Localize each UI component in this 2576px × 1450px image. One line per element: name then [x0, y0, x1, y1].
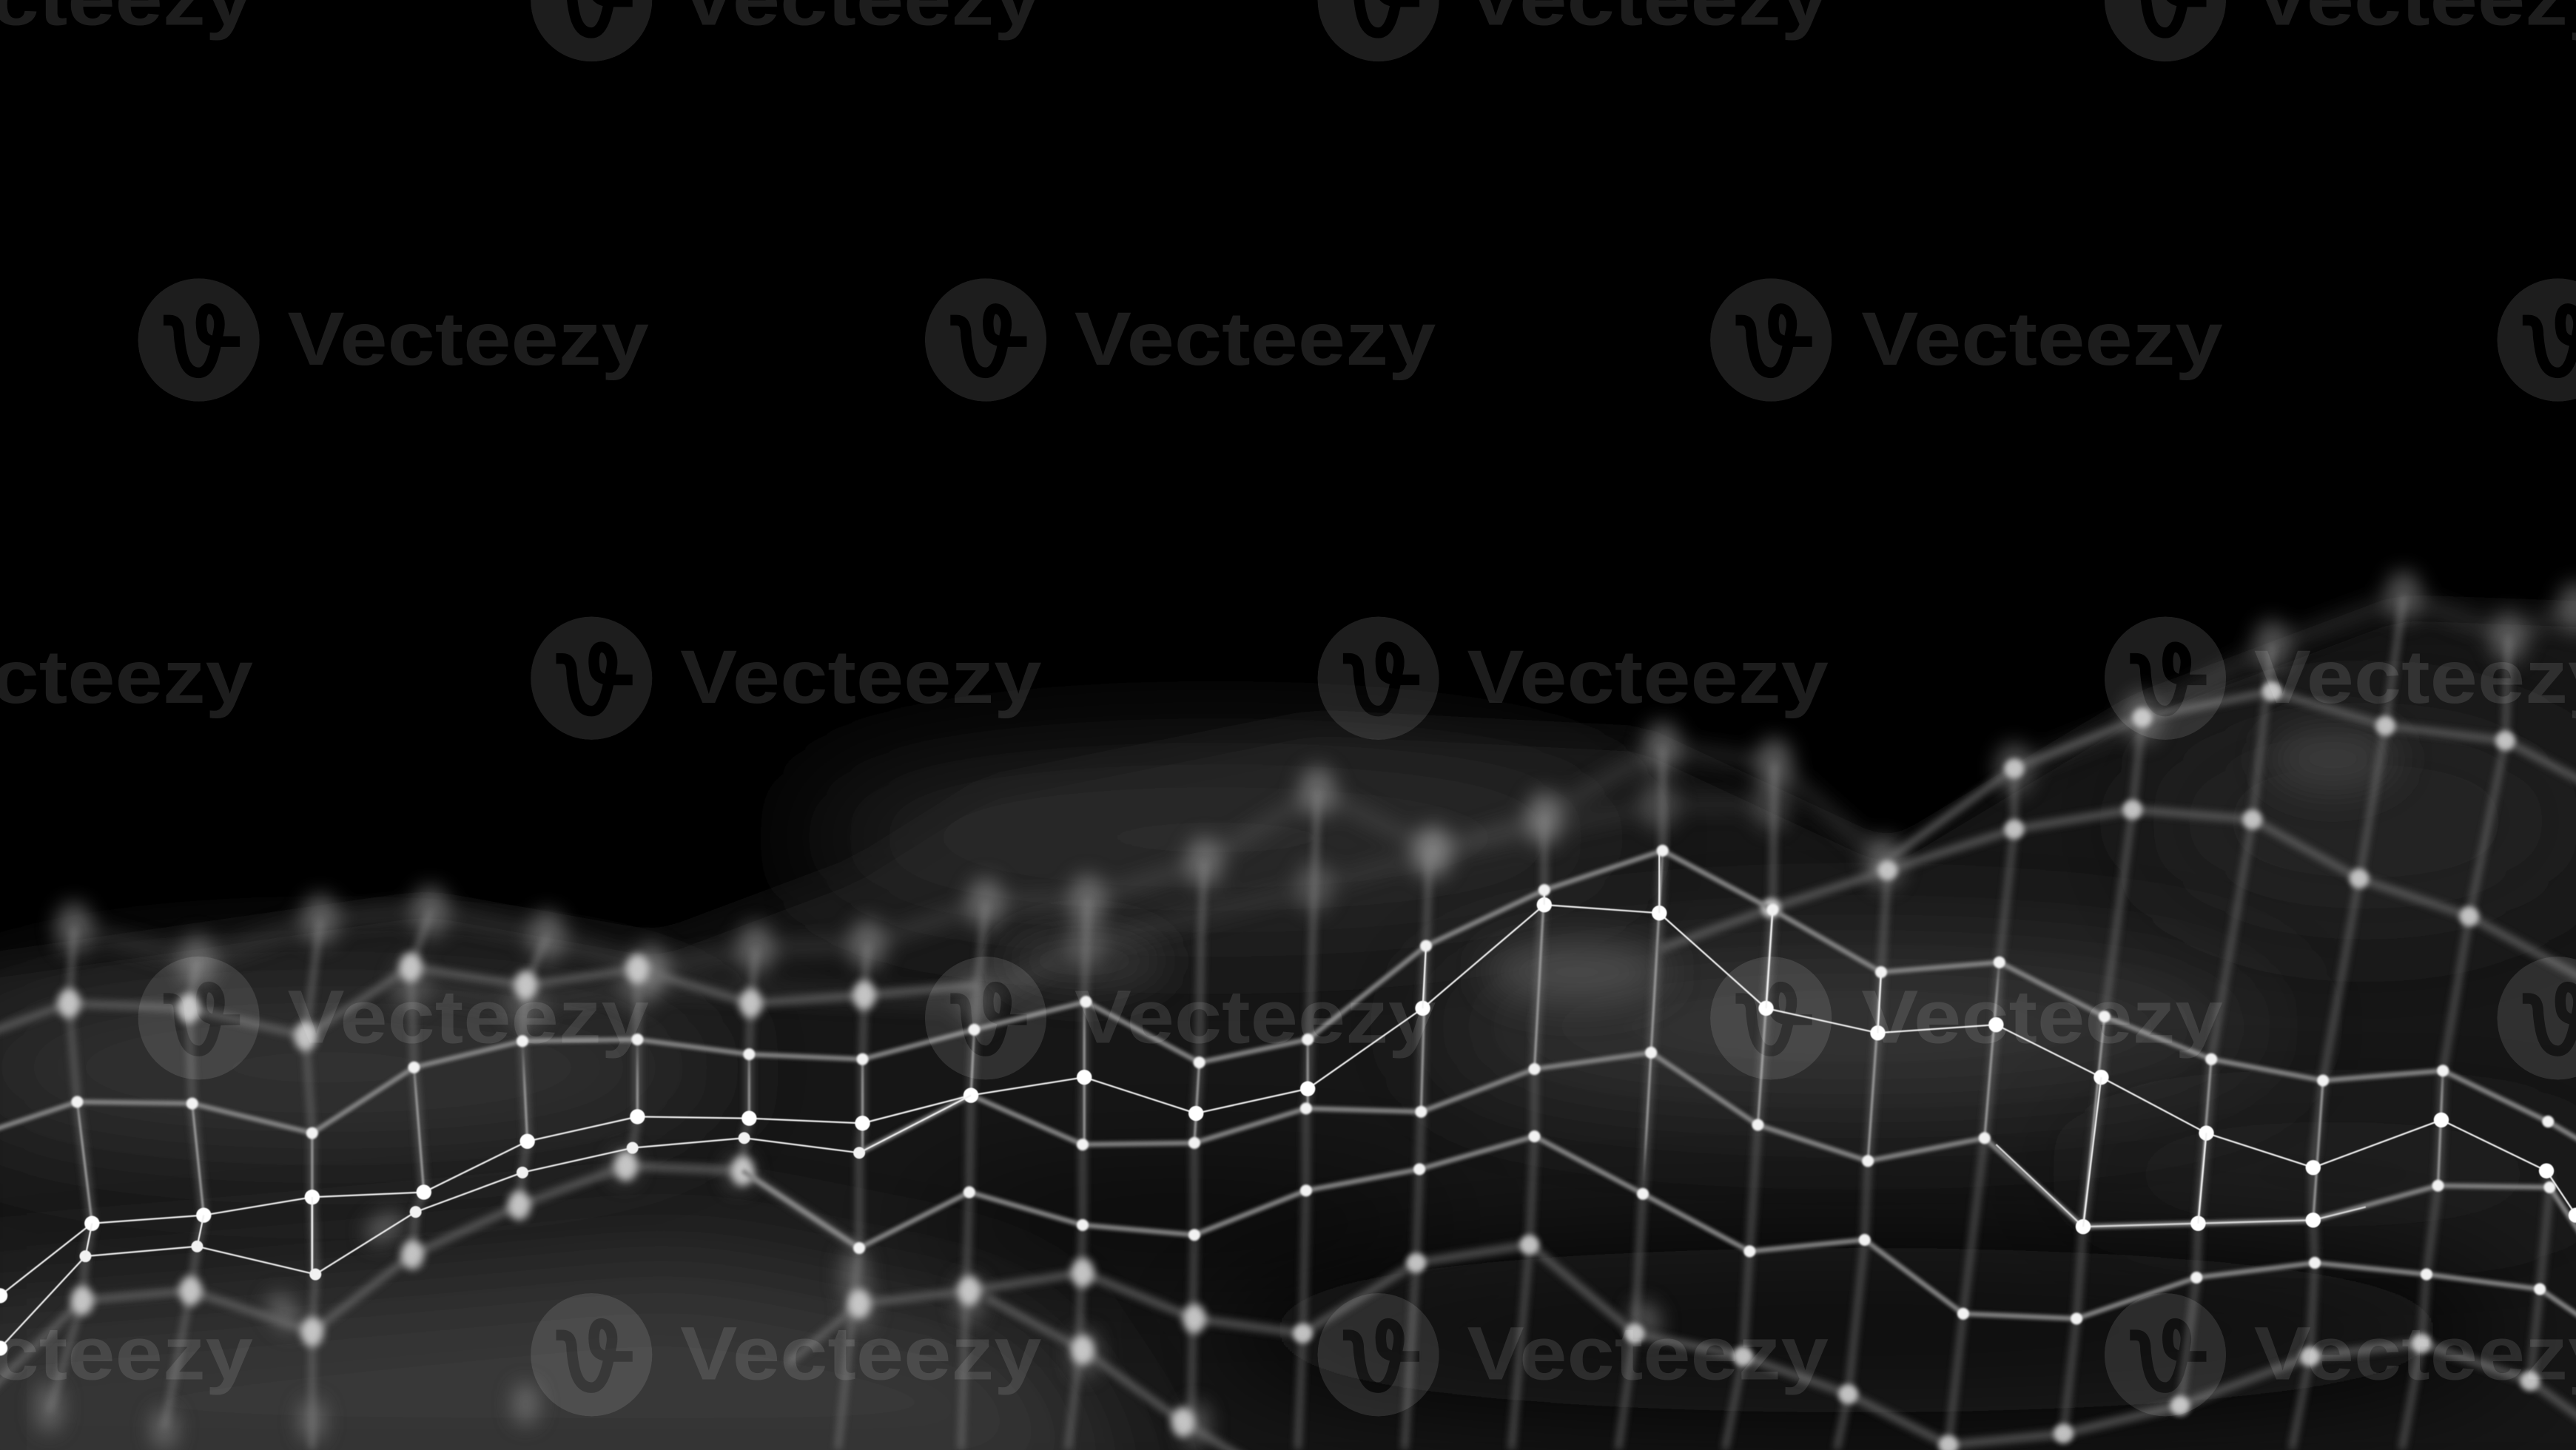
vertical mesh columns, in focus	[77, 851, 2443, 1274]
far blurred mesh rows	[50, 596, 2576, 1437]
watermark row 2: Vecteezy	[288, 297, 649, 381]
rear right mesh nodes	[1194, 691, 2576, 1445]
focused front mesh rows	[0, 851, 2576, 1348]
watermark row 5: Vecteezy	[2254, 1312, 2576, 1396]
watermark row 2	[138, 278, 2576, 402]
watermark row 4	[138, 957, 2576, 1079]
watermark row 2: Vecteezy	[1861, 297, 2223, 381]
background haze	[0, 607, 2576, 1450]
mid mesh rows	[0, 851, 2576, 1338]
watermark row 3: Vecteezy	[2254, 635, 2576, 719]
vertical mesh columns, blurred	[50, 596, 2549, 1450]
watermark row 4: Vecteezy	[288, 975, 649, 1059]
watermark row 5	[0, 1293, 2576, 1416]
watermark row 5: Vecteezy	[680, 1312, 1042, 1396]
watermark row 3	[0, 616, 2576, 740]
watermark row 3: Vecteezy	[680, 635, 1042, 719]
watermark row 5: Vecteezy	[1467, 1312, 1829, 1396]
rear mesh rows	[0, 691, 2576, 1450]
mid mesh nodes	[0, 851, 2576, 1338]
rear left mesh nodes, out of focus	[0, 967, 1302, 1450]
watermark row 1	[0, 0, 2576, 61]
watermark row 3: Vecteezy	[1467, 635, 1829, 719]
watermark row 2: Vecteezy	[1075, 297, 1436, 381]
watermark row 4: Vecteezy	[1075, 975, 1436, 1059]
watermark row 4: Vecteezy	[1861, 975, 2223, 1059]
